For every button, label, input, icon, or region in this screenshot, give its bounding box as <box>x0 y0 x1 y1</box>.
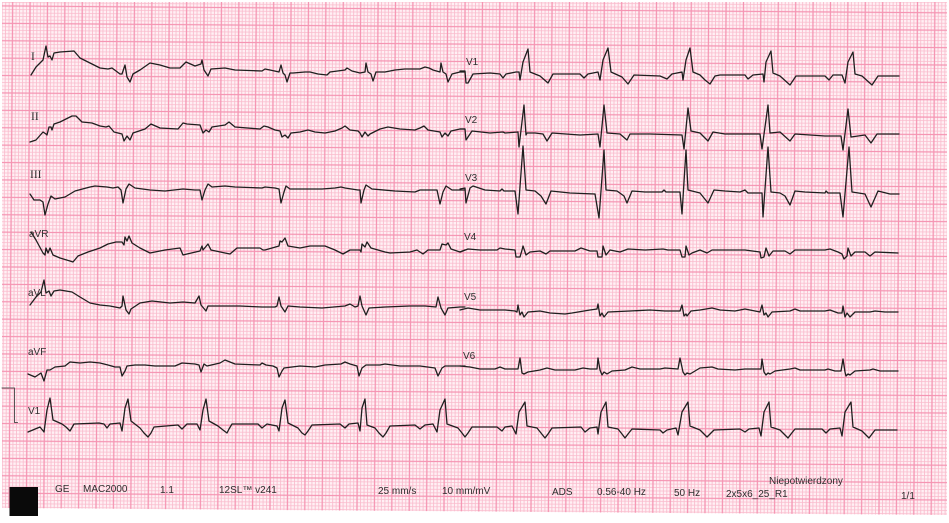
lead label V3: V3 <box>465 173 478 184</box>
lead aVL trace <box>30 280 465 315</box>
lead label V1 rhythm: V1 <box>28 406 41 417</box>
lead V1 rhythm strip <box>28 398 897 438</box>
lead aVF trace <box>28 360 465 381</box>
lead label aVL: aVL <box>28 288 46 299</box>
footer: format: 2x5x6_25_R1 <box>726 489 788 500</box>
lead label aVF: aVF <box>28 347 46 358</box>
lead label V6: V6 <box>463 351 476 362</box>
lead III trace <box>30 184 465 215</box>
black square marker <box>10 487 38 516</box>
lead label V1: V1 <box>466 57 479 68</box>
footer: mains filter: 50 Hz <box>674 488 700 499</box>
lead V6 trace <box>460 358 898 376</box>
footer: device: GE <box>55 484 70 495</box>
lead V4 trace <box>460 246 898 259</box>
footer: unconfirmed status: Niepotwierdzony <box>769 476 843 487</box>
lead V5 trace <box>460 304 898 317</box>
lead II trace <box>30 116 465 142</box>
lead label III: III <box>30 169 42 181</box>
lead label aVR: aVR <box>29 229 48 240</box>
lead label V2: V2 <box>465 115 478 126</box>
footer: filter: 0.56-40 Hz <box>597 487 646 498</box>
footer: page number: 1/1 <box>901 491 915 502</box>
lead label II: II <box>31 111 39 123</box>
lead I trace <box>31 46 465 82</box>
footer: analysis software: 12SL™ v241 <box>219 485 277 496</box>
footer: model: MAC2000 <box>83 484 128 495</box>
lead label I: I <box>31 51 35 63</box>
lead label V5: V5 <box>464 292 477 303</box>
footer: gain: 10 mm/mV <box>442 486 491 497</box>
calibration pulse <box>2 388 18 422</box>
footer: version: 1.1 <box>160 485 174 496</box>
lead aVR trace <box>31 232 465 262</box>
footer: paper speed: 25 mm/s <box>378 486 416 497</box>
lead V2 trace <box>460 105 899 150</box>
lead V1 trace <box>460 48 899 85</box>
footer: ADS: ADS <box>552 487 573 498</box>
lead V3 trace <box>460 146 899 218</box>
lead label V4: V4 <box>464 232 477 243</box>
